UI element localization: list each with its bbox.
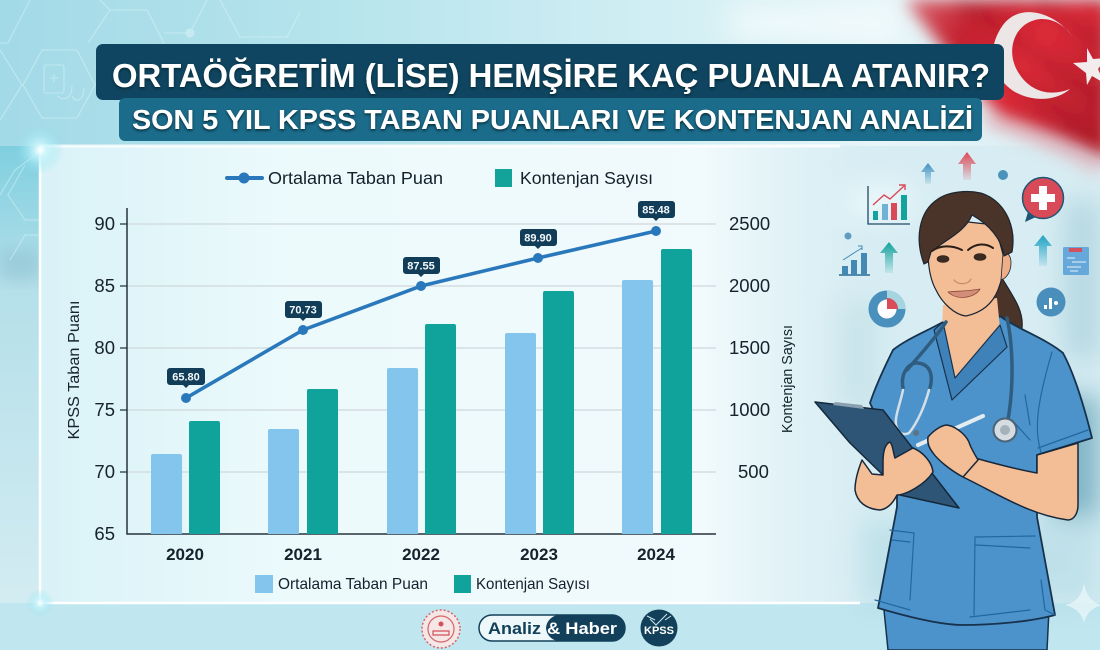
right axis title: Kontenjan Sayısı (780, 325, 796, 433)
bottom legend: Ortalama Taban Puan (278, 576, 428, 593)
logo: KPSS (640, 610, 678, 646)
icon: round stats badge (1036, 288, 1066, 316)
writing hand (928, 425, 978, 477)
logo: Analiz & Haber (479, 615, 625, 641)
scrub pants (884, 610, 1049, 650)
nurse illustration (815, 191, 1092, 650)
collar (934, 322, 1007, 400)
ear (1001, 253, 1011, 280)
logo: Analiz & Haber: & Haber (547, 619, 617, 638)
line series: ortalama taban puan (181, 226, 661, 403)
bottom legend (255, 575, 590, 593)
top legend: Ortalama Taban Puan (268, 168, 443, 188)
right axis labels (729, 213, 770, 482)
x axis labels: 2023 (520, 545, 558, 564)
clipboard (815, 402, 959, 508)
chart: gridlines and axes (120, 208, 716, 534)
left axis labels: 65 (94, 523, 115, 544)
left axis labels: 85 (94, 275, 115, 296)
flag star (1073, 48, 1100, 85)
right axis labels: 1500 (729, 337, 770, 358)
facial features (932, 244, 993, 297)
x axis labels (166, 545, 675, 564)
pen (918, 416, 983, 445)
hair (919, 191, 1013, 264)
bars: ortalama taban puan (151, 280, 653, 534)
left axis labels: 80 (94, 337, 115, 358)
top legend: Kontenjan Sayısı (520, 168, 653, 188)
logo: KPSS: KPSS (644, 625, 674, 637)
subtitle banner (119, 98, 982, 141)
right axis labels: 500 (738, 461, 769, 482)
left arm and hand (855, 442, 933, 510)
logo: Analiz & Haber: Analiz (488, 619, 541, 638)
x axis labels: 2022 (402, 545, 440, 564)
chart panel (16, 126, 870, 617)
title banner: ORTAÖĞRETİM (LİSE) HEMŞİRE KAÇ PUANLA ATANIR? (112, 57, 990, 94)
icon: bar chart with trend (868, 185, 910, 224)
logo: ministry seal (422, 610, 460, 648)
subtitle banner: SON 5 YIL KPSS TABAN PUANLARI VE KONTENJAN ANALİZİ (132, 104, 973, 135)
left axis labels: 70 (94, 461, 115, 482)
left axis labels: 90 (94, 213, 115, 234)
sparkle (1065, 583, 1100, 623)
title banner (96, 44, 1004, 100)
icon: up arrows (844, 152, 1052, 273)
crescent (993, 12, 1073, 99)
data labels: 85.48 (642, 204, 670, 216)
stethoscope (896, 318, 1016, 442)
top legend (227, 168, 653, 188)
icon: clipboard note (1063, 247, 1089, 275)
right axis labels: 1000 (729, 399, 770, 420)
data labels: 87.55 (407, 260, 435, 272)
right axis labels: 2500 (729, 213, 770, 234)
left axis labels: 75 (94, 399, 115, 420)
data labels (167, 201, 675, 388)
data labels: 70.73 (289, 304, 317, 316)
x axis labels: 2021 (284, 545, 322, 564)
left axis labels (94, 213, 115, 544)
decorative hexagon network (0, 0, 300, 260)
data labels: 89.90 (524, 232, 552, 244)
icon: small bar chart (839, 246, 870, 275)
data labels: 65.80 (172, 372, 200, 384)
left axis title: KPSS Taban Puanı (66, 300, 83, 440)
bars: kontenjan sayisi (189, 249, 692, 534)
icon: medical speech bubble (1022, 178, 1064, 222)
scrub folds and pockets (875, 352, 1088, 617)
neck (942, 298, 1000, 378)
right axis labels: 2000 (729, 275, 770, 296)
x axis labels: 2024 (637, 545, 675, 564)
x axis labels: 2020 (166, 545, 204, 564)
ponytail (990, 278, 1022, 332)
icon: donut chart (873, 295, 901, 323)
scrub top (870, 316, 1092, 625)
Turkish flag (905, 0, 1100, 170)
bottom legend: Kontenjan Sayısı (476, 576, 590, 593)
right arm (963, 443, 1078, 520)
face (928, 220, 1004, 316)
